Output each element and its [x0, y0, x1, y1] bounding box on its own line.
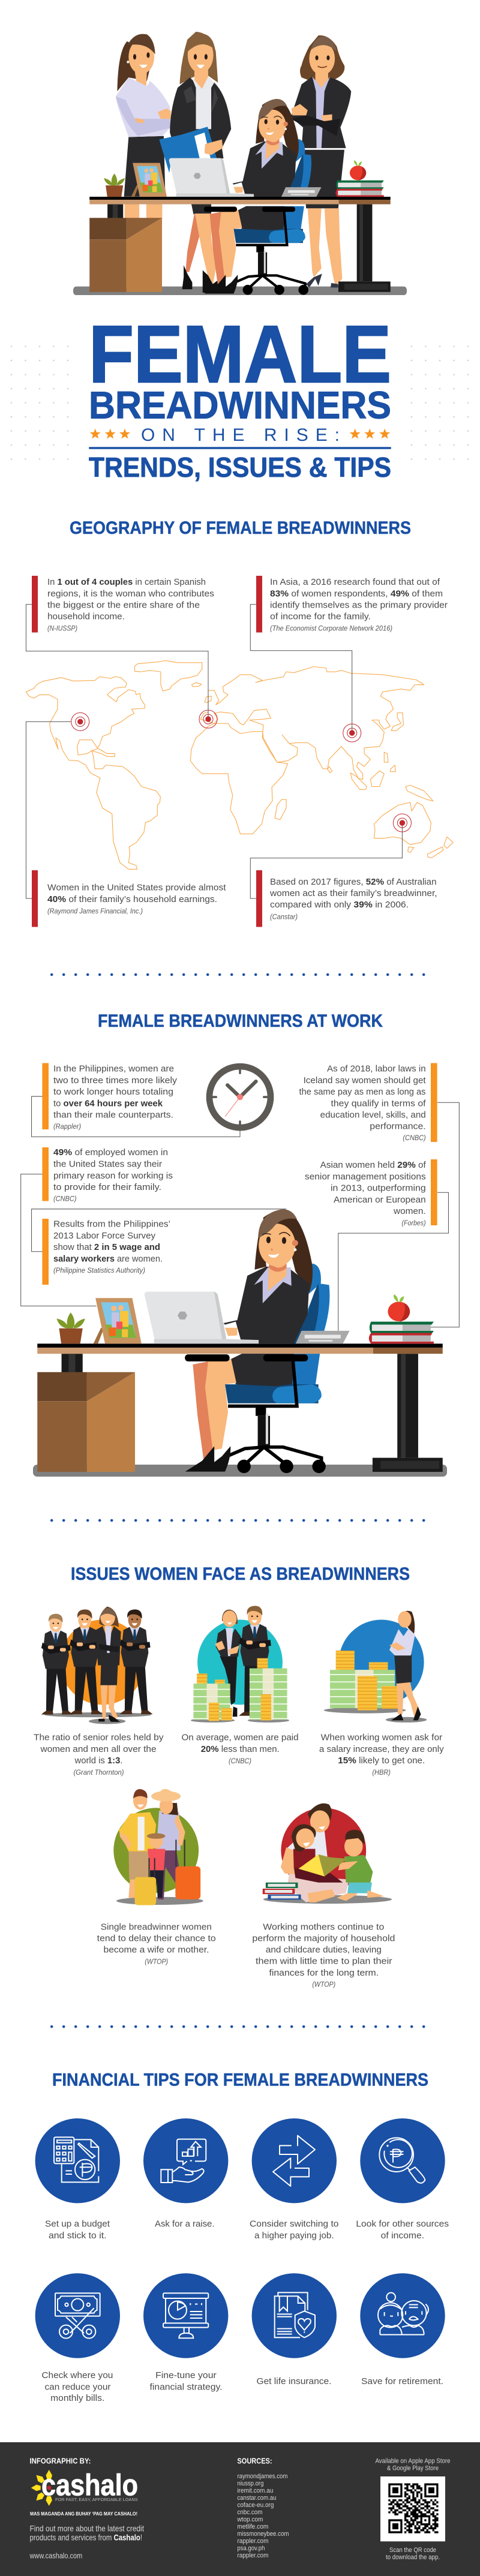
callout: United States: 40% of their family’s household earnings. [47, 894, 217, 904]
sources list: psa.gov.ph [237, 2545, 265, 2552]
icon: switching arrows [273, 2136, 315, 2186]
callout: Spain [32, 576, 214, 632]
figure: seated woman, legs and chair [185, 1354, 326, 1473]
icon: wall clock [209, 1066, 271, 1128]
caption: salary increase: a salary increase, they are only [319, 1744, 444, 1754]
desk with box, plant, photo, laptop, books [37, 1292, 443, 1472]
caption: pay gap [181, 1732, 299, 1765]
callout: Iceland labor laws: As of 2018, labor laws in [327, 1064, 426, 1074]
callout: 49 percent: the United States say their [53, 1159, 162, 1169]
QR code [380, 2476, 445, 2541]
callout: Iceland labor laws: Iceland say women should get [304, 1075, 426, 1086]
caption: pay gap: (CNBC) [229, 1758, 251, 1765]
figure: woman holding a blue folder [159, 32, 231, 293]
tip label: other income [356, 2219, 449, 2241]
sources list: iremit.com.au [237, 2487, 273, 2494]
tip label: budget [45, 2219, 110, 2241]
caption: working mothers [252, 1922, 395, 1989]
sources list: niussp.org [237, 2480, 263, 2487]
caption: senior roles: The ratio of senior roles held by [34, 1732, 164, 1743]
callout: Asian women in management: American or European [334, 1195, 426, 1205]
callout: longer hours: two to three times more likely [53, 1075, 178, 1086]
sources list [236, 2457, 289, 2559]
callout: Spain: (N-IUSSP) [47, 625, 77, 632]
caption: working mothers: finances for the long term. [269, 1968, 379, 1978]
callout: Spain: household income. [47, 612, 125, 621]
QR note: to download the app. [386, 2554, 440, 2561]
map pin: Spain [199, 710, 217, 728]
dotted divider [52, 973, 425, 976]
icon: magnifying glass [379, 2138, 425, 2183]
title: Breadwinners: BREADWINNERS [89, 384, 391, 427]
callout: Iceland labor laws: education level, skills, and [320, 1110, 426, 1120]
title: on the rise: ON THE RISE: [141, 425, 340, 445]
icon: retired couple [378, 2293, 428, 2335]
callout: Australia: Based on 2017 figures, 52% of Australian [270, 877, 437, 887]
callout: Asia [256, 576, 448, 632]
callout: labor force survey: show that 2 in 5 wage and [53, 1242, 160, 1252]
panel: geography of female breadwinners [26, 518, 453, 927]
heading: ISSUES WOMEN FACE AS BREADWINNERS [71, 1564, 410, 1584]
callout: 49 percent: primary reason for working is [53, 1171, 173, 1181]
heading: FEMALE BREADWINNERS AT WORK [98, 1011, 383, 1031]
callout: Asian women in management [305, 1159, 437, 1227]
sources list: SOURCES: [237, 2457, 272, 2466]
callout: 49 percent: to provide for their family. [53, 1182, 161, 1192]
callout: Iceland labor laws: performance. [370, 1122, 426, 1132]
footer background [0, 2442, 480, 2576]
callout: labor force survey: 2013 Labor Force Survey [53, 1231, 155, 1241]
connector lines [26, 605, 402, 898]
connector lines [21, 1096, 459, 1331]
figure: seated woman, upper body [233, 99, 311, 199]
illustration: senior roles group [41, 1607, 153, 1724]
caption: salary increase: When working women ask for [321, 1732, 442, 1743]
callout: Asia: identify themselves as the primary provider [270, 600, 448, 610]
floor [73, 287, 407, 295]
app store note: & Google Play Store [387, 2465, 439, 2472]
caption: senior roles: (Grant Thornton) [73, 1769, 124, 1777]
caption: working mothers: Working mothers continue to [263, 1922, 384, 1932]
caption: delaying marriage [97, 1922, 216, 1966]
caption: senior roles [34, 1732, 164, 1777]
icon: budget calculator [54, 2137, 98, 2182]
callout: United States: (Raymond James Financial, Inc.) [47, 908, 143, 915]
sources list: cnbc.com [237, 2509, 262, 2516]
caption: working mothers: perform the majority of household [252, 1934, 395, 1944]
callout: Asian women in management: women. [393, 1206, 426, 1216]
figure: woman with curly hair and crossed arms [291, 35, 351, 287]
heading: FINANCIAL TIPS FOR FEMALE BREADWINNERS [52, 2070, 428, 2090]
caption: delaying marriage: (WTOP) [145, 1959, 168, 1966]
callout: Iceland labor laws [299, 1063, 437, 1142]
icon: presentation board [163, 2293, 208, 2338]
logo: Cashalo: cashalo [41, 2469, 138, 2502]
callout: Asia: 83% of women respondents, 49% of them [270, 588, 443, 599]
caption: senior roles: world is 1:3. [74, 1756, 122, 1766]
dot pattern: title sides [11, 345, 469, 460]
icon: life insurance document and shield [275, 2292, 315, 2337]
illustration: pay gap couple and money [191, 1606, 289, 1723]
caption: senior roles: women and men all over the [40, 1744, 156, 1754]
world map [26, 660, 453, 869]
map pin: United States [71, 713, 89, 731]
tip label: financial strategy: Fine-tune your [155, 2370, 217, 2380]
caption: working mothers: (WTOP) [312, 1982, 335, 1989]
callout: United States [32, 870, 226, 927]
caption: salary increase [319, 1732, 444, 1777]
caption: delaying marriage: Single breadwinner women [101, 1922, 212, 1932]
callout: longer hours: In the Philippines, women are [53, 1064, 174, 1074]
tip label: higher paying job: a higher paying job. [254, 2231, 334, 2241]
tip label: life insurance: Get life insurance. [257, 2376, 331, 2386]
callout: Australia: women act as their family’s breadwinner, [269, 888, 437, 898]
callout: Iceland labor laws: the same pay as men as long as [299, 1087, 426, 1097]
callout: Iceland labor laws: (CNBC) [403, 1135, 426, 1142]
panel: female breadwinners at work [21, 1011, 459, 1477]
tip label: reduce bills: monthly bills. [50, 2393, 104, 2403]
callout: United States: Women in the United States provide almost [47, 883, 226, 893]
tip label: budget: Set up a budget [45, 2219, 110, 2229]
callout: Australia: compared with only 39% in 2006. [270, 900, 409, 910]
callout: Spain: regions, it is the woman who contributes [47, 588, 214, 599]
callout: Spain: In 1 out of 4 couples in certain Spanish [47, 577, 206, 587]
callout: Australia: (Canstar) [270, 914, 298, 921]
callout: Asian women in management: Asian women held 29% of [320, 1160, 427, 1170]
sources list: rappler.com [237, 2552, 268, 2559]
callout: labor force survey: Results from the Philippines’ [53, 1219, 170, 1229]
caption: delaying marriage: become a wife or mother. [103, 1944, 209, 1955]
stars [90, 428, 390, 439]
tip label: higher paying job [250, 2219, 338, 2241]
callout: Asian women in management: (Forbes) [401, 1220, 426, 1227]
title block [89, 309, 391, 483]
illustration: salary increase woman and money [324, 1611, 427, 1723]
panel: issues women face [34, 1564, 444, 1989]
callout: labor force survey: (Philippine Statistics Authority) [53, 1267, 145, 1275]
caption: delaying marriage: tend to delay their chance to [97, 1934, 216, 1944]
figure: woman in lilac blouse [116, 34, 171, 220]
illustration: mother reading with children [263, 1803, 392, 1904]
map pin: Australia [393, 814, 411, 832]
caption: working mothers: and childcare duties, leaving [266, 1944, 382, 1955]
callout: Asia: (The Economist Corporate Network 2016) [270, 625, 392, 632]
heading: GEOGRAPHY OF FEMALE BREADWINNERS [70, 518, 411, 538]
caption: salary increase: 15% likely to get one. [338, 1756, 425, 1766]
hero desk with box, plant, photo, laptop, books [89, 158, 391, 292]
map pin: Asia [343, 724, 361, 742]
callout: longer hours: than their male counterparts. [53, 1110, 173, 1120]
tip label: financial strategy: financial strategy. [150, 2382, 222, 2392]
callout: Asia: In Asia, a 2016 research found that out of [270, 577, 440, 587]
floor [33, 1465, 447, 1477]
sources list: wtop.com [236, 2516, 263, 2523]
callout: 49 percent [42, 1147, 173, 1203]
tip label: reduce bills: can reduce your [44, 2382, 110, 2392]
caption: pay gap: On average, women are paid [181, 1732, 299, 1743]
callout: longer hours [42, 1063, 178, 1131]
tip label: retirement: Save for retirement. [361, 2376, 443, 2386]
callout: longer hours: (Rappler) [53, 1123, 81, 1131]
caption: working mothers: them with little time to plan their [256, 1956, 392, 1967]
title: Female: FEMALE [89, 309, 391, 399]
tip label: raise: Ask for a raise. [155, 2219, 215, 2229]
QR note: Scan the QR code [389, 2547, 436, 2554]
call to action [30, 2524, 144, 2542]
dotted divider [52, 2025, 425, 2028]
callout: labor force survey [42, 1219, 170, 1285]
illustration: family with luggage [113, 1789, 203, 1905]
sources list: rappler.com [237, 2538, 268, 2545]
panel: hero illustration [73, 32, 407, 295]
credit heading: INFOGRAPHIC BY: [30, 2457, 91, 2466]
figure: seated woman, upper body [223, 1209, 329, 1343]
figure: seated woman, legs and chair [204, 206, 308, 295]
callout: Asian women in management: in 2013, outperforming [331, 1183, 426, 1194]
icon: cutting a bill [55, 2293, 100, 2338]
callout: 49 percent: (CNBC) [53, 1196, 77, 1203]
callout: longer hours: to over 64 hours per week [53, 1098, 163, 1108]
callout: Asia: of income for the family. [270, 612, 371, 621]
callout: longer hours: to work longer hours totaling [53, 1087, 173, 1097]
tip label: budget: and stick to it. [49, 2231, 107, 2241]
sources list: metlife.com [237, 2523, 268, 2530]
caption: salary increase: (HBR) [372, 1769, 391, 1777]
callout: Iceland labor laws: they qualify in terms of [331, 1098, 426, 1108]
caption: pay gap: 20% less than men. [201, 1744, 280, 1754]
title: trends, issues and tips: TRENDS, ISSUES & TIPS [89, 452, 391, 483]
sources list: canstar.com.au [237, 2494, 276, 2502]
tip label: other income: of income. [381, 2231, 424, 2241]
callout: Asian women in management: senior management positions [305, 1171, 426, 1182]
tagline: MAS MAGANDA ANG BUHAY ‘PAG MAY CASHALO! [30, 2511, 137, 2517]
dotted divider [52, 1519, 425, 1522]
callout: Australia [256, 870, 437, 927]
app store note [376, 2458, 450, 2472]
tip label: reduce bills: Check where you [41, 2370, 113, 2380]
call to action: products and services from Cashalo! [30, 2532, 142, 2542]
callout: Spain: the biggest or the entire share of the [47, 600, 200, 610]
panel: footer [0, 2442, 480, 2576]
call to action: Find out more about the latest credit [30, 2524, 144, 2533]
tip label: other income: Look for other sources [356, 2219, 449, 2229]
website: www.cashalo.com [29, 2551, 82, 2560]
sources list: missmoneybee.com [237, 2530, 289, 2538]
QR note [386, 2547, 440, 2561]
icon: raise in hand [161, 2139, 206, 2183]
panel: financial tips [35, 2070, 449, 2403]
tip label: higher paying job: Consider switching to [250, 2219, 338, 2229]
sources list: raymondjames.com [237, 2473, 287, 2480]
tip circles [35, 2118, 445, 2358]
sources list: coface-eu.org [237, 2502, 274, 2509]
logo: Cashalo: FOR FAST, EASY, AFFORDABLE LOANS [55, 2497, 138, 2502]
tip label: reduce bills [41, 2370, 113, 2403]
callout: 49 percent: 49% of employed women in [53, 1147, 168, 1158]
app store note: Available on Apple App Store [376, 2458, 450, 2465]
divider rule [89, 447, 391, 449]
tip label: financial strategy [150, 2370, 222, 2392]
callout: labor force survey: salary workers are women. [53, 1254, 163, 1264]
